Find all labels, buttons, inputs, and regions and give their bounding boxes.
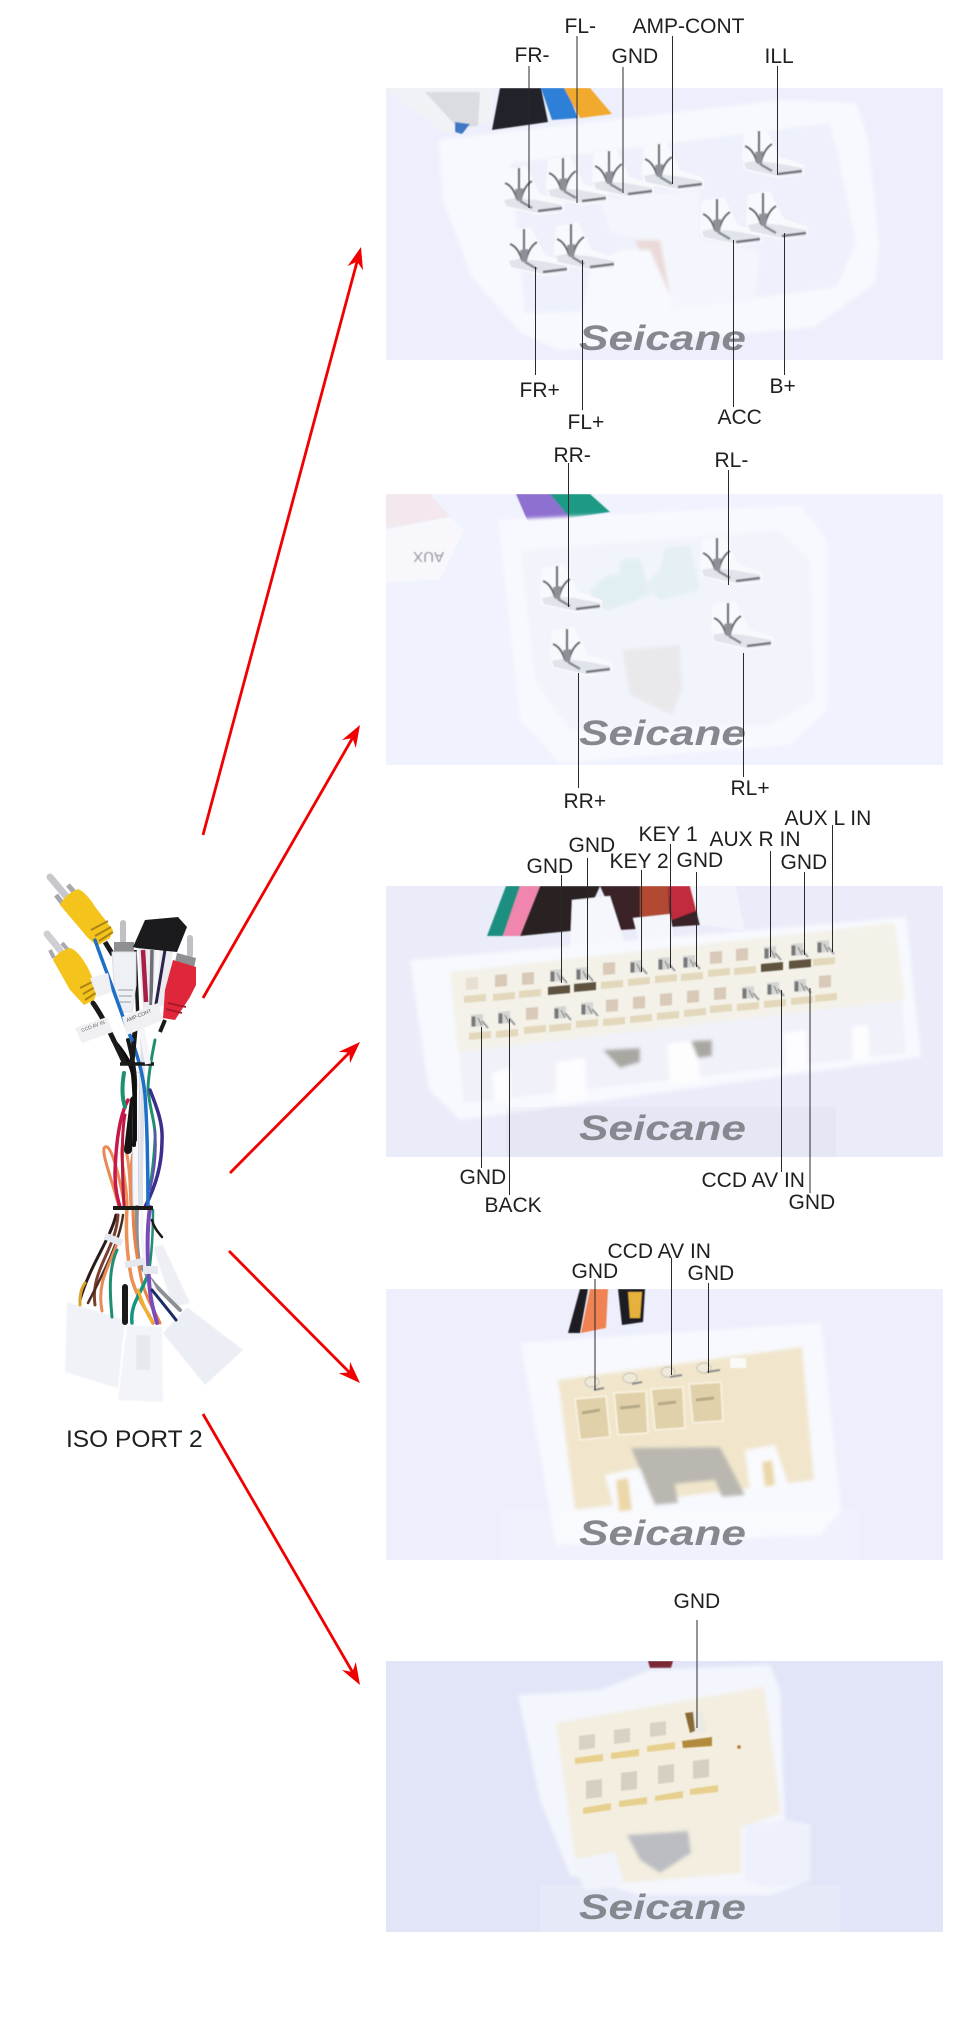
icon: wires and tag: AUX <box>413 548 444 565</box>
label: AMP-CONT: AMP-CONT <box>632 15 745 38</box>
label: GND: GND <box>676 849 723 872</box>
terminals <box>502 129 808 276</box>
label: B+: B+ <box>770 375 796 398</box>
label: ILL <box>764 45 794 175</box>
arrow to photo 3 <box>230 1042 360 1173</box>
label: FR-: FR- <box>514 44 550 67</box>
arrow to photo 2 <box>203 725 360 998</box>
cable ties <box>105 1064 158 1270</box>
label: GND: GND <box>460 1166 506 1189</box>
label: GND: GND <box>572 1260 618 1283</box>
RCA plug: red <box>163 938 196 1020</box>
label: CCD AV IN: CCD AV IN <box>702 1169 805 1192</box>
label: ILL: ILL <box>764 45 794 68</box>
RCA plug: white <box>112 923 136 1012</box>
wire tags: AMP-CONT <box>126 1008 152 1024</box>
label: GND: GND <box>568 834 615 857</box>
label: GND: GND <box>526 855 573 878</box>
blue wire <box>95 940 132 1040</box>
panel: connector photo 4 <box>386 1289 943 1560</box>
connector body <box>526 512 698 714</box>
watermark: Seicane <box>579 1109 746 1148</box>
label: FR+ <box>520 267 560 402</box>
label: GND: GND <box>612 45 658 68</box>
label: GND <box>676 849 723 967</box>
pin slots <box>575 1711 741 1814</box>
label: GND: GND <box>688 1262 734 1285</box>
label: GND <box>780 851 827 955</box>
icon: wire <box>648 1661 673 1668</box>
callouts: connector 2 <box>554 444 770 813</box>
label: BACK: BACK <box>484 1194 542 1217</box>
label: AUX R IN: AUX R IN <box>710 828 801 851</box>
label: GND: GND <box>788 1191 835 1214</box>
arrow to photo 5 <box>203 1414 360 1685</box>
callouts: connector 3 <box>460 807 871 1217</box>
label: GND <box>674 1590 720 1728</box>
RCA plug: yellow lower <box>47 934 98 1005</box>
watermark: Seicane <box>579 1514 746 1553</box>
watermark: Seicane <box>579 1888 746 1927</box>
terminals <box>540 536 773 676</box>
pin slots <box>464 940 837 1040</box>
connector body <box>439 100 879 350</box>
white plug connector front <box>118 1325 163 1402</box>
connector body <box>521 1323 841 1545</box>
label: KEY 2: KEY 2 <box>610 850 669 873</box>
terminals and pockets <box>575 1358 746 1440</box>
title: ISO PORT 2: ISO PORT 2 <box>66 1426 203 1453</box>
icon: wires <box>487 886 745 950</box>
arrow to photo 1 <box>203 247 363 835</box>
connector body <box>518 1665 810 1895</box>
panel: connector photo 5 <box>386 1661 943 1932</box>
RCA plug: yellow upper <box>50 877 113 946</box>
icon: wires and tag <box>386 494 610 562</box>
lower wire bundle <box>80 1040 180 1323</box>
callouts: connector 4 <box>572 1240 734 1390</box>
watermark: Seicane <box>579 714 746 753</box>
label: RR+: RR+ <box>564 790 606 813</box>
panel: connector photo 3 <box>386 886 943 1157</box>
label: RR-: RR- <box>554 444 591 467</box>
icon: wires and tag <box>425 88 612 135</box>
label: KEY 1: KEY 1 <box>638 823 698 846</box>
label: CCD AV IN <box>608 1240 711 1375</box>
label: FR+: FR+ <box>520 379 560 402</box>
panel: connector photo 2 <box>386 494 943 765</box>
label: GND: GND <box>780 851 827 874</box>
watermark: Seicane <box>579 319 746 358</box>
wire tags <box>75 973 163 1043</box>
wire tags: CCD AV IN <box>81 1020 106 1034</box>
icon: ISO PORT 2 wiring harness <box>47 877 243 1402</box>
upper cables <box>93 942 173 1064</box>
connector body <box>410 917 921 1120</box>
white plug connectors back <box>65 1245 243 1388</box>
panel: connector photo 1 <box>386 88 943 360</box>
label: GND <box>688 1262 734 1373</box>
label: GND: GND <box>674 1590 720 1613</box>
label: AUX L IN: AUX L IN <box>784 807 871 830</box>
label: FL-: FL- <box>564 15 596 38</box>
label: GND <box>526 855 573 983</box>
label: FL+: FL+ <box>568 411 604 434</box>
label: ACC: ACC <box>718 406 762 429</box>
icon: wires <box>568 1289 645 1333</box>
label: GND <box>572 1260 618 1390</box>
label: AUX R IN <box>710 828 801 957</box>
black multi-pin plug <box>133 917 187 952</box>
label: RL-: RL- <box>714 449 748 472</box>
label: CCD AV IN: CCD AV IN <box>608 1240 711 1263</box>
label: RL+: RL+ <box>730 777 770 800</box>
label: RL- <box>714 449 748 585</box>
label: RR+ <box>564 673 606 813</box>
label: KEY 2 <box>610 850 669 972</box>
callouts: connector 1 <box>514 15 796 434</box>
arrow to photo 4 <box>229 1251 360 1383</box>
